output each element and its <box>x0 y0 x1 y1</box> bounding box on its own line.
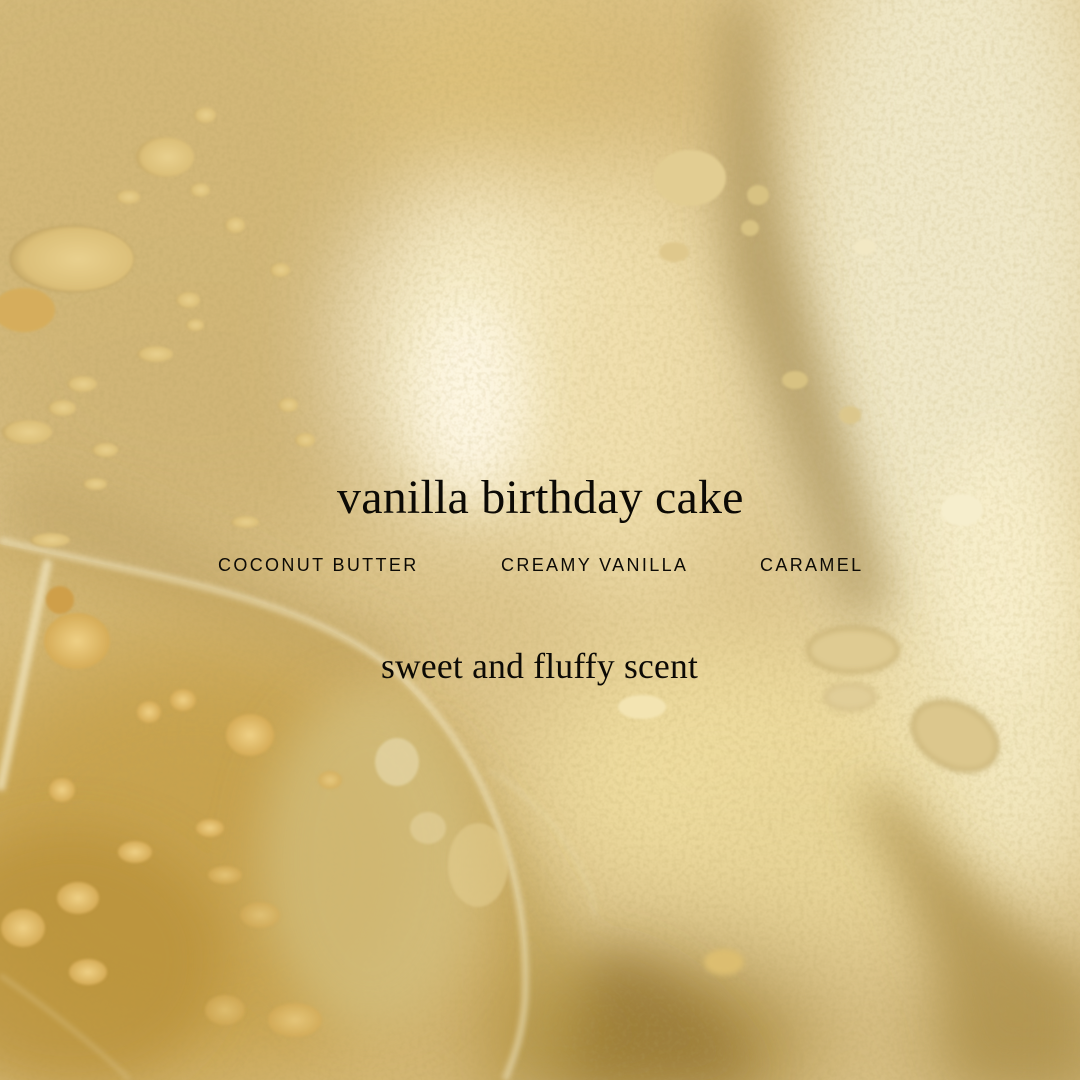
droplets inside bubble <box>1 586 508 1037</box>
droplets upper <box>0 107 983 719</box>
ingredient: coconut butter: COCONUT BUTTER <box>218 555 419 575</box>
round bubble lens <box>0 520 595 1080</box>
highlights <box>415 300 1060 690</box>
title: vanilla birthday cake <box>337 471 744 524</box>
droplets lower right <box>704 628 1009 975</box>
scent description: sweet and fluffy scent <box>381 646 698 686</box>
ingredient: creamy vanilla: CREAMY VANILLA <box>501 555 688 575</box>
ingredient: caramel: CARAMEL <box>760 555 863 575</box>
